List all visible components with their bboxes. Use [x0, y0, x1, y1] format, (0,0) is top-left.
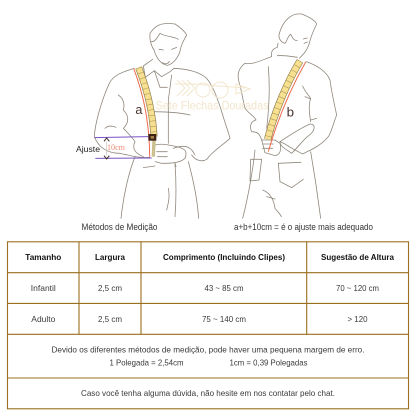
row: Infantil: [31, 283, 379, 293]
note: measurement margin: Devido os diferentes métodos de medição, pode haver uma pequena margem de erro.: [52, 344, 364, 354]
label: a: a: [135, 103, 143, 117]
header row: Comprimento (Incluindo Clipes): [163, 252, 285, 262]
label: Ajuste: Ajuste: [76, 144, 100, 154]
red measuring line a: [134, 68, 150, 157]
purple adjustment lines: [94, 137, 152, 158]
label: 10cm: 10cm: [107, 143, 126, 152]
row: Adulto: > 120: [348, 314, 368, 324]
note: measurement margin: 1 Polegada = 2,54cm: [110, 358, 184, 368]
row: Adulto: Adulto: [31, 314, 56, 324]
row: Adulto: 75 ~ 140 cm: [202, 314, 246, 324]
table grid: [8, 242, 408, 409]
red measuring line b: [268, 62, 306, 152]
buckle clip: [148, 134, 156, 141]
illustration: front view man measuring shoulder to waist: [94, 23, 230, 218]
header row: Tamanho: [25, 252, 61, 262]
man front outline: [94, 23, 230, 218]
illustration: back view man: [238, 14, 337, 218]
header row: Largura: [95, 252, 125, 262]
note: measurement margin: [52, 344, 364, 368]
caption: fit formula: a+b+10cm = é o ajuste mais adequado: [234, 222, 373, 232]
size table: [8, 242, 408, 409]
watermark: Sete Flechas Douradas: [156, 80, 269, 112]
row: Infantil: 43 ~ 85 cm: [204, 283, 244, 293]
measuring tape a: [139, 68, 154, 137]
arrows: [104, 138, 109, 159]
watermark arrows icon: [175, 80, 250, 98]
caption: Métodos de Medição: Métodos de Medição: [82, 222, 158, 232]
man back outline: [238, 14, 337, 218]
note: measurement margin: 1cm = 0,39 Polegadas: [230, 358, 308, 368]
row: Adulto: 2,5 cm: [98, 314, 122, 324]
note: contact chat: Caso você tenha alguma dúvida, não hesite em nos contatar pelo chat.: [81, 388, 335, 398]
row: Infantil: 2,5 cm: [98, 283, 122, 293]
row: Adulto: [31, 314, 368, 324]
label: b: b: [287, 105, 294, 120]
watermark text: Sete Flechas Douradas: [156, 100, 269, 112]
header row: Sugestão de Altura: [321, 252, 394, 262]
row: Infantil: 70 ~ 120 cm: [336, 283, 379, 293]
header row: [25, 252, 394, 262]
row: Infantil: Infantil: [31, 283, 56, 293]
measuring tape b: [268, 61, 300, 139]
